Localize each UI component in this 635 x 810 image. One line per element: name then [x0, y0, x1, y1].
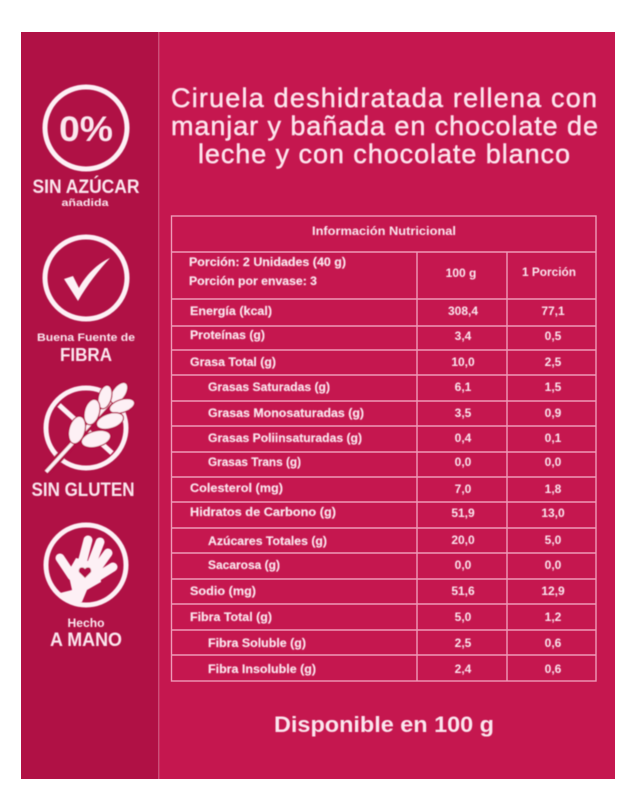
table column: 100 g values: 3,4 — [455, 329, 472, 343]
table column: 1 porcion values: 0,5 — [545, 329, 562, 343]
label: hecho a mano — [50, 616, 122, 651]
table column: 100 g values — [448, 304, 478, 676]
table heading: Información Nutricional — [312, 226, 456, 238]
table header row: 100 g — [446, 266, 476, 280]
table row labels: Fibra Soluble (g) — [208, 638, 306, 650]
label: buena fuente de fibra: FIBRA — [60, 345, 112, 365]
table column: 1 porcion values: 1,2 — [545, 610, 562, 624]
table column: 100 g values: 2,4 — [455, 662, 472, 676]
table header row — [189, 257, 576, 288]
table column: 100 g values: 51,6 — [451, 584, 475, 598]
table row labels: Grasas Monosaturadas (g) — [208, 408, 364, 420]
title — [171, 83, 598, 169]
table column: 1 porcion values — [541, 304, 565, 676]
table column: 1 porcion values: 0,9 — [545, 406, 562, 420]
table grid — [171, 216, 596, 681]
label: sin azucar: SIN AZÚCAR — [32, 176, 140, 198]
icon: hand with heart — [46, 525, 126, 605]
table column: 1 porcion values: 13,0 — [541, 506, 565, 520]
table row labels — [190, 306, 364, 676]
table column: 1 porcion values: 2,5 — [545, 355, 562, 369]
label: sin azucar: añadida — [62, 197, 109, 209]
table column: 1 porcion values: 1,5 — [545, 380, 562, 394]
label: hecho a mano: Hecho — [68, 616, 104, 630]
table row labels: Energía (kcal) — [190, 306, 272, 318]
table row labels: Proteínas (g) — [190, 330, 265, 342]
table column: 100 g values: 308,4 — [448, 304, 478, 318]
table column: 100 g values: 7,0 — [455, 482, 472, 496]
label: hecho a mano: A MANO — [50, 630, 122, 651]
table column: 100 g values: 2,5 — [455, 636, 472, 650]
table column: 1 porcion values: 0,6 — [545, 662, 562, 676]
table row labels: Sacarosa (g) — [208, 560, 280, 572]
icon: no gluten — [46, 379, 136, 472]
table column: 100 g values: 20,0 — [451, 533, 475, 547]
label: sin gluten: SIN GLUTEN — [32, 480, 134, 501]
table column: 1 porcion values: 77,1 — [541, 304, 565, 318]
table column: 1 porcion values: 0,0 — [545, 558, 562, 572]
table header row: Porción por envase: 3 — [189, 276, 317, 288]
table column: 1 porcion values: 1,8 — [545, 482, 562, 496]
label: buena fuente de fibra: Buena Fuente de — [37, 332, 135, 344]
table header row: 1 Porción — [522, 265, 576, 279]
icon: zero percent: 0% — [59, 110, 113, 149]
label: sin azucar — [32, 176, 140, 209]
footer text: Disponible en 100 g — [274, 712, 494, 737]
table column: 100 g values: 51,9 — [451, 506, 475, 520]
table column: 1 porcion values: 5,0 — [545, 533, 562, 547]
nutrition table — [171, 216, 596, 681]
table row labels: Grasas Trans (g) — [208, 457, 301, 469]
table column: 100 g values: 5,0 — [455, 610, 472, 624]
icon: zero percent — [45, 87, 127, 169]
table column: 100 g values: 0,0 — [455, 455, 472, 469]
table row labels: Hidratos de Carbono (g) — [190, 507, 336, 519]
table column: 100 g values: 0,0 — [455, 558, 472, 572]
table column: 1 porcion values: 0,1 — [545, 431, 562, 445]
title: manjar y bañada en chocolate de — [171, 111, 598, 141]
table row labels: Colesterol (mg) — [190, 483, 283, 495]
table column: 100 g values: 0,4 — [455, 431, 472, 445]
table row labels: Fibra Total (g) — [190, 612, 272, 624]
table column: 1 porcion values: 12,9 — [541, 584, 565, 598]
table column: 100 g values: 6,1 — [455, 380, 472, 394]
icon: check mark — [45, 237, 127, 319]
table row labels: Fibra Insoluble (g) — [208, 664, 316, 676]
table column: 100 g values: 10,0 — [451, 355, 475, 369]
title: Ciruela deshidratada rellena con — [171, 83, 597, 113]
table row labels: Grasas Poliinsaturadas (g) — [208, 433, 362, 445]
title: leche y con chocolate blanco — [198, 139, 570, 169]
label: buena fuente de fibra — [37, 332, 135, 365]
table column: 1 porcion values: 0,6 — [545, 636, 562, 650]
table row labels: Sodio (mg) — [190, 586, 256, 598]
table row labels: Azúcares Totales (g) — [208, 536, 327, 548]
table row labels: Grasa Total (g) — [190, 357, 276, 369]
table row labels: Grasas Saturadas (g) — [208, 382, 330, 394]
table column: 1 porcion values: 0,0 — [545, 455, 562, 469]
table column: 100 g values: 3,5 — [455, 406, 472, 420]
panel: left sidebar — [21, 32, 159, 779]
table header row: Porción: 2 Unidades (40 g) — [189, 257, 346, 269]
